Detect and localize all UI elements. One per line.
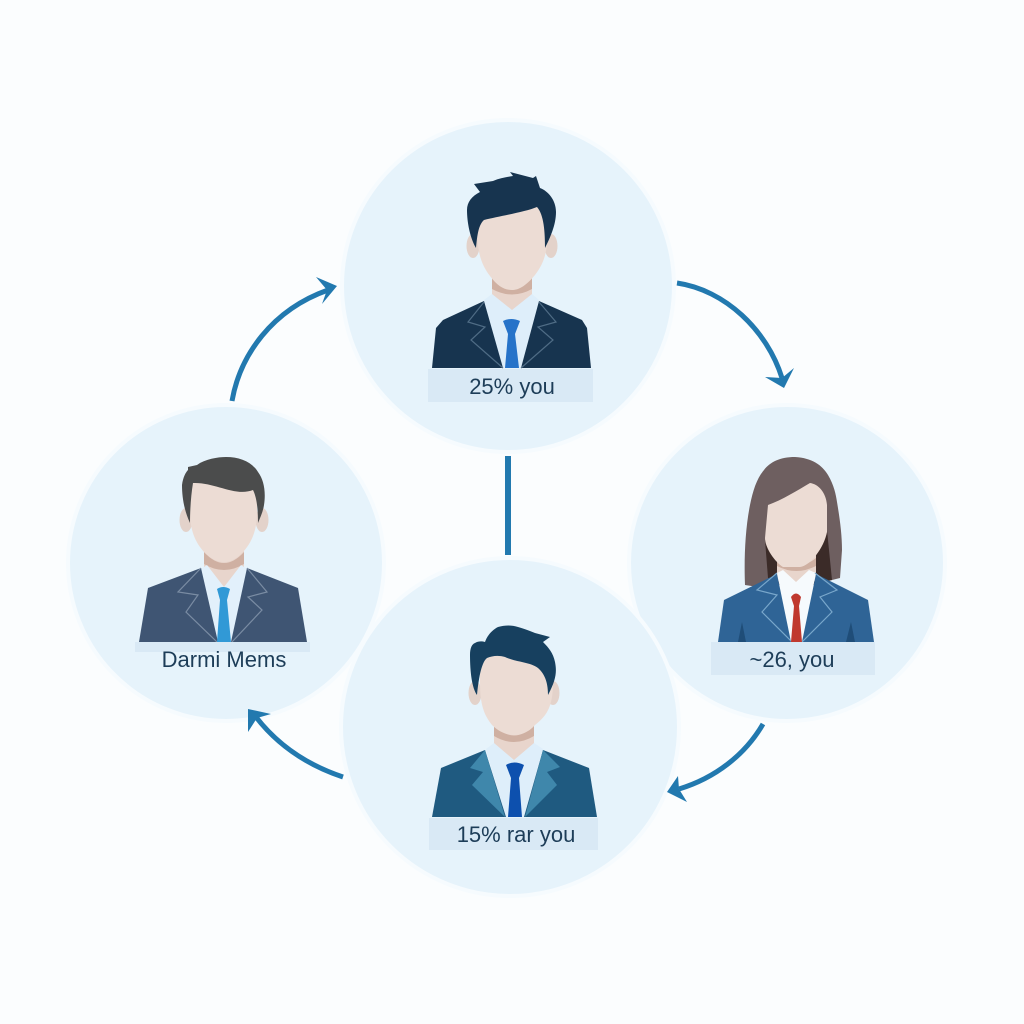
arrow: left to top	[232, 277, 337, 401]
panel: left person	[68, 405, 384, 721]
arrow: top to right	[677, 283, 794, 388]
arrow: right to bottom	[667, 724, 763, 802]
label: 15% rar you: 15% rar you	[457, 822, 575, 847]
label: 25% you: 25% you	[469, 374, 555, 399]
arrow: bottom to left	[248, 709, 343, 777]
label: 25% you	[428, 369, 593, 402]
icon: bottom person avatar	[432, 626, 597, 817]
panel: top person	[342, 120, 674, 452]
label: Darmi Mems: Darmi Mems	[162, 647, 286, 672]
icon: left person avatar	[139, 457, 307, 642]
panel: right person	[629, 405, 945, 721]
panel: bottom person	[341, 558, 679, 896]
connector line: top to bottom	[505, 456, 511, 555]
icon: right person avatar	[718, 457, 874, 642]
label: ~26, you: ~26, you	[749, 647, 835, 672]
label: Darmi Mems	[135, 642, 310, 672]
label: 15% rar you	[429, 818, 598, 850]
label: ~26, you	[711, 642, 875, 675]
icon: top person avatar	[432, 172, 591, 368]
